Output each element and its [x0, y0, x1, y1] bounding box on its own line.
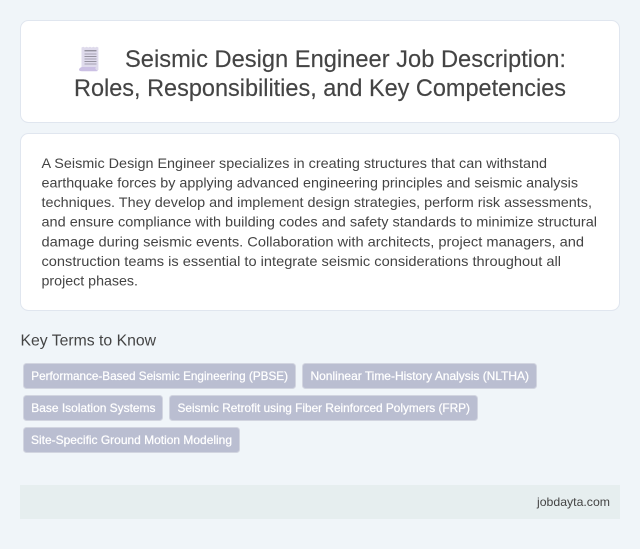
title — [74, 46, 566, 102]
icon: receipt document — [79, 47, 98, 71]
description text: project phases. — [42, 272, 138, 288]
description text: construction teams is essential to integrate seismic considerations throughout all — [42, 253, 561, 269]
description text: and ensure compliance with building codes and safety standards to minimize structural — [42, 214, 597, 230]
title: Seismic Design Engineer Job Description: — [125, 46, 566, 73]
chip: ground motion — [24, 428, 240, 452]
panel: description card — [20, 134, 620, 310]
title: Roles, Responsibilities, and Key Competencies — [74, 75, 566, 102]
chip: FRP retrofit: Seismic Retrofit using Fiber Reinforced Polymers (FRP) — [178, 401, 470, 415]
footer bar — [20, 485, 620, 519]
description text — [42, 155, 597, 288]
chip: PBSE: Performance-Based Seismic Engineering (PBSE) — [31, 369, 288, 383]
description text: techniques. They develop and implement design strategies, perform risk assessments, — [42, 194, 592, 210]
description text: damage during seismic events. Collaboration with architects, project managers, and — [42, 233, 584, 249]
heading: key terms: Key Terms to Know — [20, 332, 156, 350]
chip: FRP retrofit — [170, 396, 478, 420]
chip: base isolation — [24, 396, 162, 420]
chip: base isolation: Base Isolation Systems — [31, 401, 155, 415]
chip: PBSE — [24, 364, 296, 388]
description text: earthquake forces by applying advanced engineering principles and seismic analysis — [42, 174, 578, 190]
chip: NLTHA — [302, 364, 536, 388]
chip: NLTHA: Nonlinear Time-History Analysis (NLTHA) — [310, 369, 529, 383]
chips: key terms — [24, 364, 536, 452]
panel: title card — [20, 20, 620, 122]
description text: A Seismic Design Engineer specializes in creating structures that can withstand — [42, 155, 547, 171]
footer brand: jobdayta.com — [536, 495, 610, 509]
chip: ground motion: Site-Specific Ground Motion Modeling — [31, 433, 232, 447]
